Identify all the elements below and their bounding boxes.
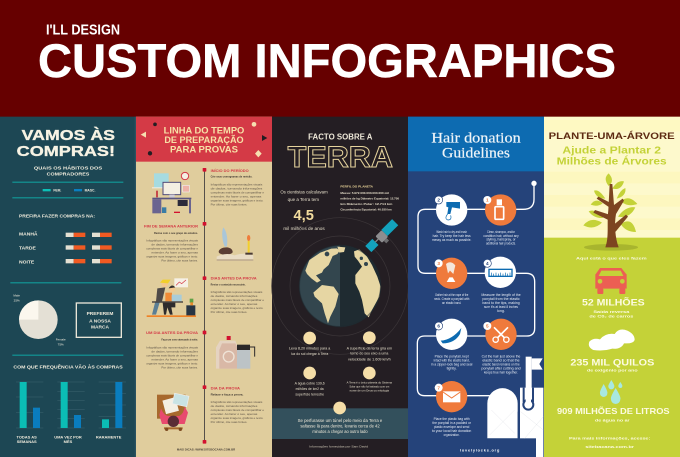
tunnel fact band: Se perfurasse um túnel pelo meio da Terra e: [298, 418, 383, 423]
step 5: [481, 319, 521, 375]
step 2 text: Por último, cite suas fontes.: [161, 258, 198, 262]
step 7: 7: [437, 385, 440, 390]
step 1 text: [211, 168, 264, 206]
step 6: in a zipper-lock bag and seal: [431, 363, 473, 367]
illustration: desk: [152, 172, 191, 213]
planet profile: [340, 185, 399, 212]
tunnel fact band: minutos a chegar ao outro lado: [312, 429, 368, 434]
step 2 text: entender. Ao fazer o seu, apenas: [151, 250, 198, 254]
shopping time bars: NOITE: [19, 259, 35, 265]
step 2: hair. Try keep the hair less: [433, 234, 471, 238]
step 3 text: Infográficos são representações visuais: [211, 290, 263, 294]
subtitle: QUAIS OS HÁBITOS DOS: [34, 165, 103, 172]
stat: cars: 52 MILHÕES: [582, 297, 645, 307]
stat: cars: de C0₂ de carros: [589, 315, 633, 319]
panel: Facto sobre a Terra: [272, 117, 408, 457]
step 1 text: de dados, tornando informações: [211, 186, 263, 190]
step 4: ponytail from the elastic: [482, 297, 520, 301]
callout: prefer our brand: A NOSSA: [89, 318, 111, 324]
step 2 text: de dados, tornando informações: [151, 242, 199, 246]
legend: MASC.: [85, 188, 95, 192]
bar charts: TODAS AS: [16, 434, 37, 439]
lead text: Aqui está o que eles fazem: [576, 255, 647, 260]
step 5 text: Relaxe e faça a prova.: [211, 392, 243, 396]
step 5 text: entender. Ao fazer o seu, apenas: [211, 412, 258, 416]
subtitle: [34, 165, 103, 177]
heading: I'll design: I'LL DESIGN: [46, 22, 120, 38]
bar charts: UMA VEZ POR: [54, 434, 82, 439]
panel: Plante uma árvore: [544, 117, 680, 457]
illustration: coffee bag and pot: [216, 336, 255, 369]
step 6: 6: [437, 324, 440, 329]
fact texts: Solar que não foi batizado com um: [349, 385, 390, 389]
bar charts: MÊS: [64, 439, 73, 444]
step 5: ponytail after cutting and: [481, 367, 521, 371]
stat: cars: Saída reversa: [593, 310, 631, 314]
step 7: plastic envelope and send: [434, 425, 469, 429]
step 2: messy as much as possible.: [432, 238, 471, 242]
step 3 text: organize suas imagens, gráficos e texto.: [211, 306, 263, 310]
footer: [569, 436, 650, 449]
step 2 text: Infográficos são representações visuais: [146, 238, 198, 242]
step 4: Measure the length of the: [481, 293, 521, 297]
pie chart: Male: [13, 294, 20, 298]
illustration: student from above: [157, 393, 189, 431]
step 1: styling, hairspray, or: [486, 238, 517, 242]
step 1: Clean, shampoo, and/or: [487, 230, 516, 234]
step 5 text: de dados, tornando informações: [211, 404, 258, 408]
step 6: tightly.: [447, 367, 457, 371]
frequency heading: COM QUE FREQUÊNCIA VÃO ÀS COMPRAS: [13, 363, 123, 371]
header title: [164, 125, 244, 154]
bar charts: SEMANAS: [17, 439, 37, 444]
step 4 text: [146, 331, 199, 369]
fact texts: nome de um Deus ou mitologia: [350, 389, 390, 393]
step 5 text: Por último, cite suas fontes.: [211, 420, 247, 424]
step 6: [431, 319, 473, 371]
legend: FEM.: [53, 188, 61, 192]
header banner: [0, 0, 680, 117]
source line: MAIS DICAS: WWW.SITEBOCANA.COM.BR: [177, 448, 235, 452]
shopping time bars: [19, 214, 112, 265]
planet profile: km Diâmetro Polar: 12.714 km: [340, 202, 393, 206]
step 3: Gather hair at the nape of the: [435, 293, 468, 297]
fact texts: superfície terrestre: [295, 393, 324, 397]
step 1 text: organize suas imagens, gráficos e texto.: [211, 198, 263, 202]
step 7: Place the plastic bag with: [434, 417, 470, 421]
planet profile: Circunferência Equatorial: 40.030 km: [340, 208, 392, 212]
step 3 text: complexas mais fáceis de compartilhar e: [211, 298, 264, 302]
step 7: [432, 381, 472, 437]
panel title: PLANTE-UMA-ÁRVORE: [549, 130, 675, 141]
step 2 text: Revise com o seu grupo de estudos.: [154, 231, 198, 235]
header title: DE PREPARAÇÃO: [164, 135, 244, 145]
step 3: an elastic band.: [442, 301, 461, 305]
fact texts: luz do sol chegar à Terra: [291, 352, 329, 356]
step 2 text: organize suas imagens, gráficos e texto.: [146, 254, 198, 258]
orbit rings: [272, 218, 408, 354]
step 3 text: DIAS ANTES DA PROVA: [211, 277, 257, 281]
Terra outlined word: TERRA: [288, 141, 393, 174]
step connector: [417, 184, 535, 396]
step 3 text: Por último, cite suas fontes.: [211, 310, 247, 314]
step 3 text: [211, 277, 264, 314]
legend: [43, 188, 95, 192]
fact texts: velocidade de 1.609 km/h: [348, 357, 391, 361]
step 5: keeps true hair together.: [484, 371, 518, 375]
tunnel fact band: [272, 402, 408, 439]
stat: oxygen: 235 MIL QUILOS: [570, 357, 654, 367]
step 1 text: Crie seus cronogramas de revisão.: [211, 175, 252, 179]
footer: sitebacana.com.br: [585, 445, 635, 449]
stat: oxygen: [570, 357, 654, 373]
callout: prefer our brand: [76, 303, 121, 337]
step 5 text: DIA DA PROVA: [211, 386, 240, 390]
pie chart: 25%: [14, 299, 20, 303]
step 4: long.: [497, 309, 505, 313]
icon: cloud: [589, 330, 635, 350]
step 4 text: organize suas imagens, gráficos e texto.: [146, 361, 198, 365]
age fact: 4,5: [293, 208, 314, 224]
step 1 text: entender. Ao fazer o seu, apenas: [211, 194, 262, 198]
shopping time bars: PREFIRA FAZER COMPRAS NA:: [19, 214, 95, 220]
panel header: Guidelines: [442, 145, 510, 161]
pie chart: [13, 294, 66, 347]
title: custom infographics: CUSTOM INFOGRAPHICS: [38, 34, 616, 87]
mailbox: [487, 357, 543, 457]
panel header: [136, 117, 272, 162]
step 4 text: Faça um sono atenuado à noite.: [161, 338, 198, 342]
planet profile: PERFIL DO PLANETA: [340, 185, 374, 189]
stat: water: 909 MILHÕES DE LITROS: [557, 406, 670, 416]
fact texts: A superfície da terra gira em: [347, 346, 392, 350]
callout: prefer our brand: PREFEREM: [87, 311, 113, 317]
header title: LINHA DO TEMPO: [164, 125, 244, 135]
step 4 text: complexas mais fáceis de compartilhar e: [146, 353, 198, 357]
footer url: lovelylocks.org: [460, 449, 500, 453]
step 3 text: Revise o conteúdo necessário.: [211, 282, 246, 286]
fact circles: [303, 331, 376, 379]
step 1: [483, 194, 519, 245]
panel header: Hair donation: [431, 130, 521, 146]
shopping time bars: TARDE: [19, 246, 36, 252]
callout: prefer our brand: MARCA: [91, 324, 109, 330]
panel: Hair donation guidelines: [408, 117, 544, 457]
fact texts: milhões de km2 da: [296, 387, 325, 391]
step 4 text: Por último, cite suas fontes.: [161, 365, 198, 369]
subtitle: Ajude a Plantar 2: [562, 146, 661, 157]
icon: water drops: [600, 380, 622, 404]
planet profile: Massa: 5.972.000.000.000.000 mil: [340, 191, 389, 195]
step 6: Place the ponytail, kept: [435, 355, 469, 359]
illustration: book and candle: [217, 227, 253, 261]
step 4 text: entender. Ao fazer o seu, apenas: [151, 357, 198, 361]
icon: tree: [583, 173, 638, 251]
step 4: 4: [486, 261, 489, 266]
step 5: elastic band remains on the: [482, 363, 520, 367]
step 3: 3: [437, 261, 440, 266]
stat: oxygen: de oxigênio por ano: [587, 369, 639, 373]
step 3 text: entender. Ao fazer o seu, apenas: [211, 302, 258, 306]
bar charts: RARAMENTE: [96, 434, 122, 439]
planet profile: milhões de kg Diâmetro Equatorial: 12.756: [340, 197, 399, 201]
fact texts: [289, 346, 393, 397]
step 1 text: complexas mais fáceis de compartilhar e: [211, 190, 264, 194]
panel title: VAMOS ÀS: [22, 127, 115, 144]
age fact: que a Terra tem: [288, 197, 319, 202]
footer: Para mais informações, acesse:: [569, 436, 650, 440]
fact texts: torno do seu eixo a uma: [350, 352, 389, 356]
step 1 text: Por último, cite suas fontes.: [211, 202, 247, 206]
panel: Linha do tempo: [136, 117, 272, 457]
step 3: [434, 258, 469, 305]
shopping time bars: MANHÃ: [19, 231, 38, 238]
icon: satellite: [365, 219, 401, 255]
step 4: sure it's at least 8 inches: [484, 305, 518, 309]
step 1 text: Infográficos são representações visuais: [211, 182, 263, 186]
stat: water: [557, 406, 670, 422]
step 5 text: Infográficos são representações visuais: [211, 400, 263, 404]
age fact: [280, 190, 328, 231]
step 1: additional hair products.: [486, 241, 516, 245]
age fact: mil milhões de anos: [283, 226, 325, 231]
step 2: Wash hair to dry and brush: [436, 230, 467, 234]
step 5: elastic band so that the: [482, 359, 520, 363]
step 1: 1: [486, 198, 489, 203]
step 1 text: INÍCIO DO PERÍODO: [211, 168, 249, 173]
panel title: FACTO SOBRE A: [308, 132, 373, 141]
step 4 text: Infográficos são representações visuais: [146, 345, 198, 349]
step 1: condition hair, without any: [483, 234, 519, 238]
illustration: students at laptop: [147, 278, 196, 317]
step 5 text: organize suas imagens, gráficos e texto.: [211, 416, 263, 420]
step 2 text: FIM DE SEMANA ANTERIOR: [144, 224, 198, 228]
subtitle: [557, 146, 667, 167]
fact texts: Leva 8,20 minutos para a: [289, 346, 331, 350]
stat: cars: [582, 297, 645, 319]
stat: water: de água no ar: [595, 418, 630, 422]
step 2 text: complexas mais fáceis de compartilhar e: [146, 246, 198, 250]
panel: Vamos às compras: [0, 117, 136, 457]
step 4 text: UM DIA ANTES DA PROVA: [146, 331, 198, 335]
fact texts: A água cobre 139,6: [295, 381, 325, 385]
step 5 text: complexas mais fáceis de compartilhar e: [211, 408, 264, 412]
panel header: [408, 117, 544, 171]
step 4: [481, 257, 521, 313]
step 7: to your local hair donation: [432, 429, 471, 433]
fact texts: A Terra é o único planeta do Sistema: [347, 381, 393, 385]
step 3: neck. Create a ponytail with: [434, 297, 469, 301]
step 5: Cut the hair just above the: [482, 355, 520, 359]
step 5 text: [211, 386, 264, 424]
bar charts: [16, 382, 126, 444]
step 6: intact with the elastic band,: [434, 359, 470, 363]
globe: [299, 245, 381, 327]
step 7: the ponytail in a padded or: [432, 421, 472, 425]
step 3 text: de dados, tornando informações: [211, 294, 258, 298]
timeline: [203, 168, 206, 444]
icon: car: [595, 268, 627, 294]
age fact: Os cientistas calculavam: [280, 190, 328, 195]
step 4 text: de dados, tornando informações: [151, 349, 199, 353]
subtitle: Milhões de Árvores: [557, 156, 667, 167]
step 2: [432, 194, 471, 242]
panel title: COMPRAS!: [17, 144, 115, 160]
step 5: 5: [486, 324, 489, 329]
step 7: organization.: [444, 433, 460, 437]
header title: PARA PROVAS: [170, 144, 238, 154]
source line: Informações fornecidas por Sam David: [309, 444, 368, 448]
step 2 text: [144, 224, 199, 262]
pie chart: 75%: [58, 343, 64, 347]
tunnel fact band: saltasse lá para dentro, levaria cerca de 42: [300, 423, 380, 428]
step 4: band to the tips, making: [482, 301, 520, 305]
pie chart: Female: [56, 338, 66, 342]
step 2: 2: [437, 198, 440, 203]
panel title: [17, 127, 115, 160]
subtitle: COMPRADORES: [47, 171, 90, 177]
